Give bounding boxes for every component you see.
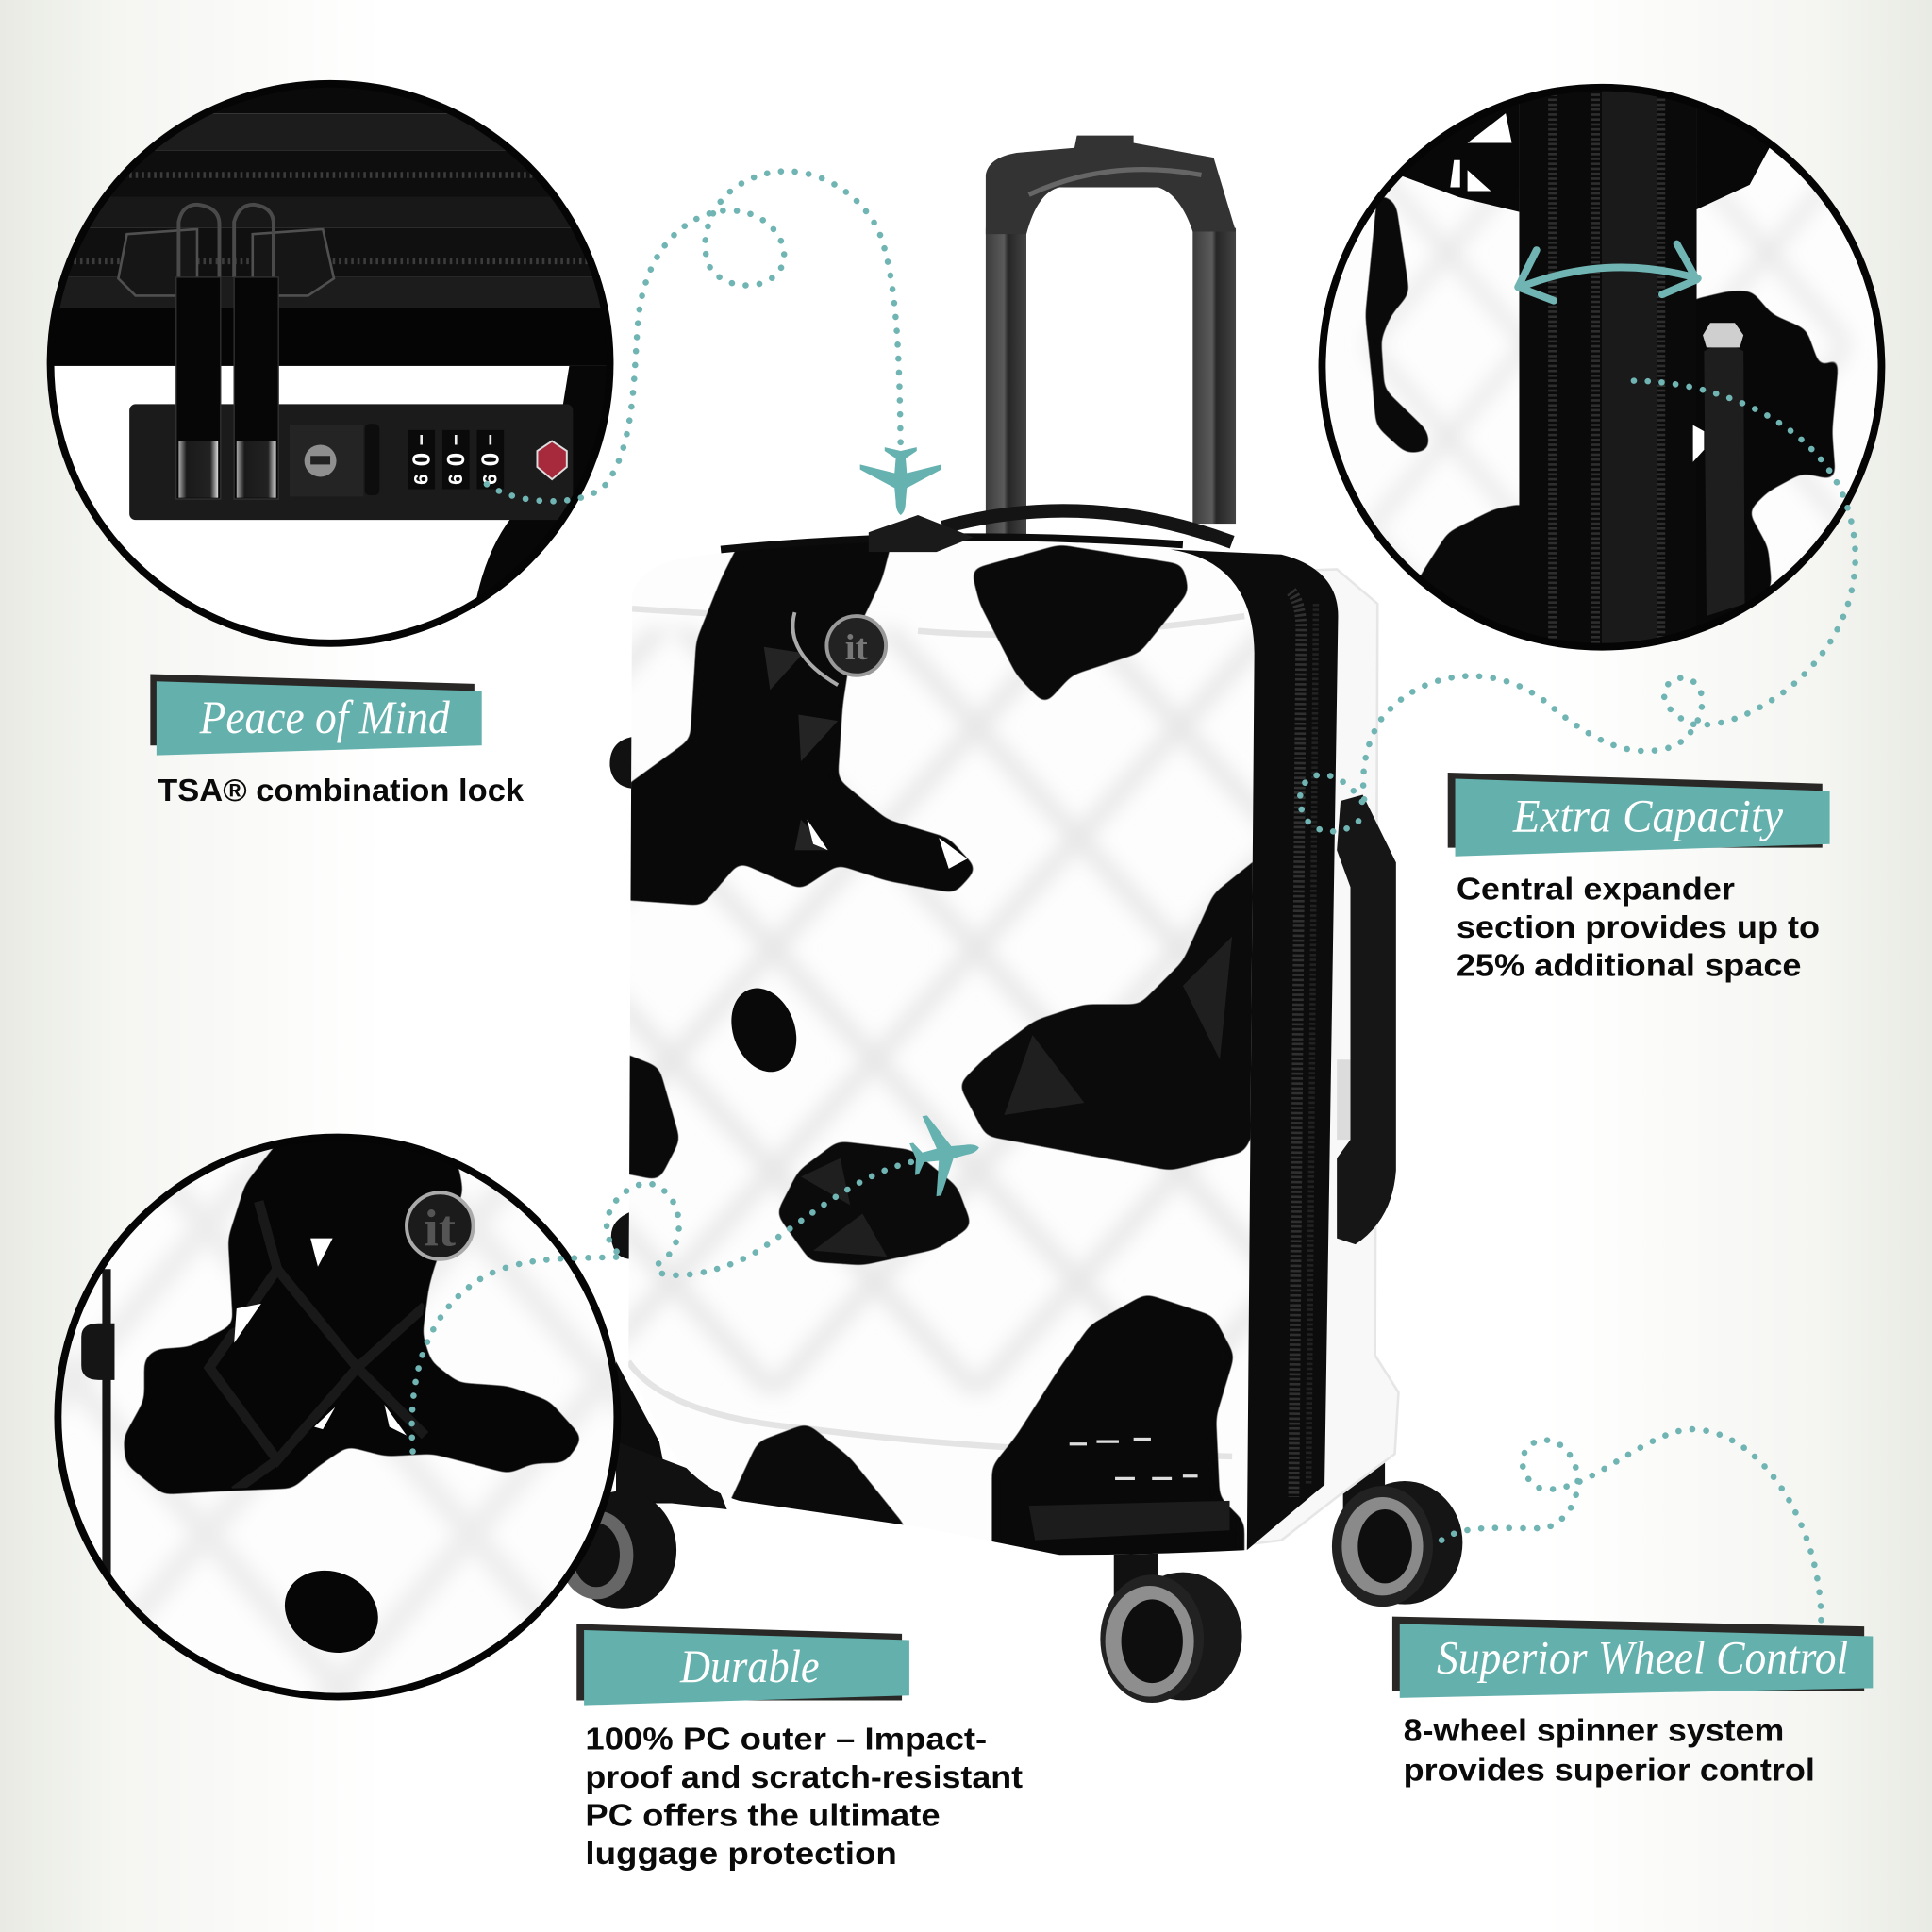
side handle window (1337, 1059, 1351, 1140)
side handle (1337, 794, 1396, 1244)
circle: peace of mind detail (37, 74, 628, 665)
cow spot top left (616, 536, 977, 906)
text: PC offers the ultimate (585, 1799, 941, 1834)
cow spot middle (776, 1141, 973, 1265)
text: 8-wheel spinner system (1404, 1714, 1784, 1749)
heading: Extra Capacity (1512, 791, 1784, 842)
expander band (1519, 74, 1697, 653)
side handle close-up (1704, 345, 1744, 616)
text: Central expander (1457, 872, 1735, 907)
side panel (1232, 569, 1398, 1546)
combination wheels: 0 (408, 453, 436, 466)
zip sliders (118, 229, 334, 295)
circle: durable detail (49, 1127, 628, 1707)
text: 25% additional space (1457, 948, 1802, 983)
edge strip and bump (81, 1269, 114, 1577)
it logo (792, 612, 886, 685)
text: 100% PC outer – Impact- (585, 1723, 987, 1757)
top spot highlights (1450, 113, 1512, 191)
TSA badge (537, 441, 567, 479)
band stripes (1553, 74, 1661, 653)
right rear wheel (1332, 1441, 1462, 1607)
text (1404, 1714, 1815, 1788)
corner glints (1070, 1440, 1198, 1478)
spot lattice (209, 1201, 425, 1491)
black shell area (476, 366, 607, 598)
shell lip (628, 608, 1244, 1457)
spot highlights (234, 1239, 407, 1436)
dotted route: wheels (1441, 1429, 1821, 1621)
cow dot (272, 1556, 391, 1668)
combination wheels: 0 (441, 453, 470, 466)
panel: peace of mind (150, 674, 525, 808)
lock plate (129, 404, 573, 520)
logo: it (425, 1199, 457, 1257)
panel: superior wheel control (1392, 1617, 1873, 1788)
left spot (1365, 191, 1429, 454)
circle: extra capacity detail (1319, 74, 1885, 665)
zip loops (178, 205, 274, 277)
cow spot bottom centre (730, 1424, 904, 1524)
key lock (290, 424, 379, 496)
cow spot left edge (629, 1055, 679, 1179)
cow spot dot (731, 989, 796, 1072)
right spot (1688, 291, 1840, 665)
top spot left (1392, 74, 1519, 212)
top seam (721, 537, 1183, 550)
text (585, 1723, 1023, 1872)
banner (150, 674, 482, 756)
zipper pulls (869, 515, 974, 552)
window sliver (1693, 425, 1704, 462)
heading: Durable (679, 1641, 820, 1692)
zip pull tabs (176, 277, 278, 499)
expander zipper (1171, 550, 1338, 1550)
banner (576, 1624, 909, 1706)
logo (407, 1192, 474, 1259)
combination wheels: 9 (443, 474, 465, 485)
text: proof and scratch-resistant (585, 1760, 1023, 1795)
combination wheels (408, 430, 505, 490)
heading: Superior Wheel Control (1437, 1632, 1848, 1684)
banner (1392, 1617, 1873, 1698)
text: provides superior control (1404, 1753, 1815, 1788)
combination wheels: 9 (409, 474, 431, 485)
text: section provides up to (1457, 910, 1820, 945)
highlight in spot (808, 820, 967, 869)
spot facets (764, 647, 838, 850)
panel: durable (576, 1624, 1023, 1872)
dotted route: lock to top (487, 172, 901, 501)
cow spot right (961, 861, 1253, 1170)
chrome knob (1703, 323, 1743, 347)
front shell (610, 530, 1275, 1583)
top carry handle (942, 510, 1232, 542)
panel: extra capacity (1448, 773, 1830, 983)
foot bar (1029, 1501, 1230, 1541)
suitcase (559, 136, 1462, 1703)
cow spot top centre (971, 544, 1189, 705)
front wheel (1100, 1541, 1242, 1703)
right spot facets (1004, 937, 1232, 1115)
text: TSA® combination lock (158, 774, 525, 808)
side bumps (609, 737, 632, 1259)
dotted route: expander (1300, 381, 1856, 831)
fabric and zip bands (54, 87, 607, 366)
combination wheels: 9 (478, 474, 500, 485)
cow spot bottom right (991, 1293, 1244, 1583)
lower left spot (1392, 503, 1528, 665)
telescopic handle (986, 136, 1236, 536)
top spot right (1697, 86, 1770, 209)
banner (1448, 773, 1830, 857)
dotted route: shell (412, 1160, 918, 1452)
icon: plane top (860, 447, 941, 515)
text: luggage protection (585, 1837, 897, 1872)
it logo: it (845, 627, 868, 668)
expansion arrow (1518, 244, 1698, 301)
heading: Peace of Mind (199, 691, 450, 743)
combination wheels: 0 (476, 453, 505, 466)
large cow spot (124, 1131, 583, 1494)
middle spot facets (801, 1158, 887, 1257)
rear left wheel (559, 1361, 727, 1609)
icon: plane middle (906, 1108, 986, 1199)
text (1457, 872, 1820, 983)
